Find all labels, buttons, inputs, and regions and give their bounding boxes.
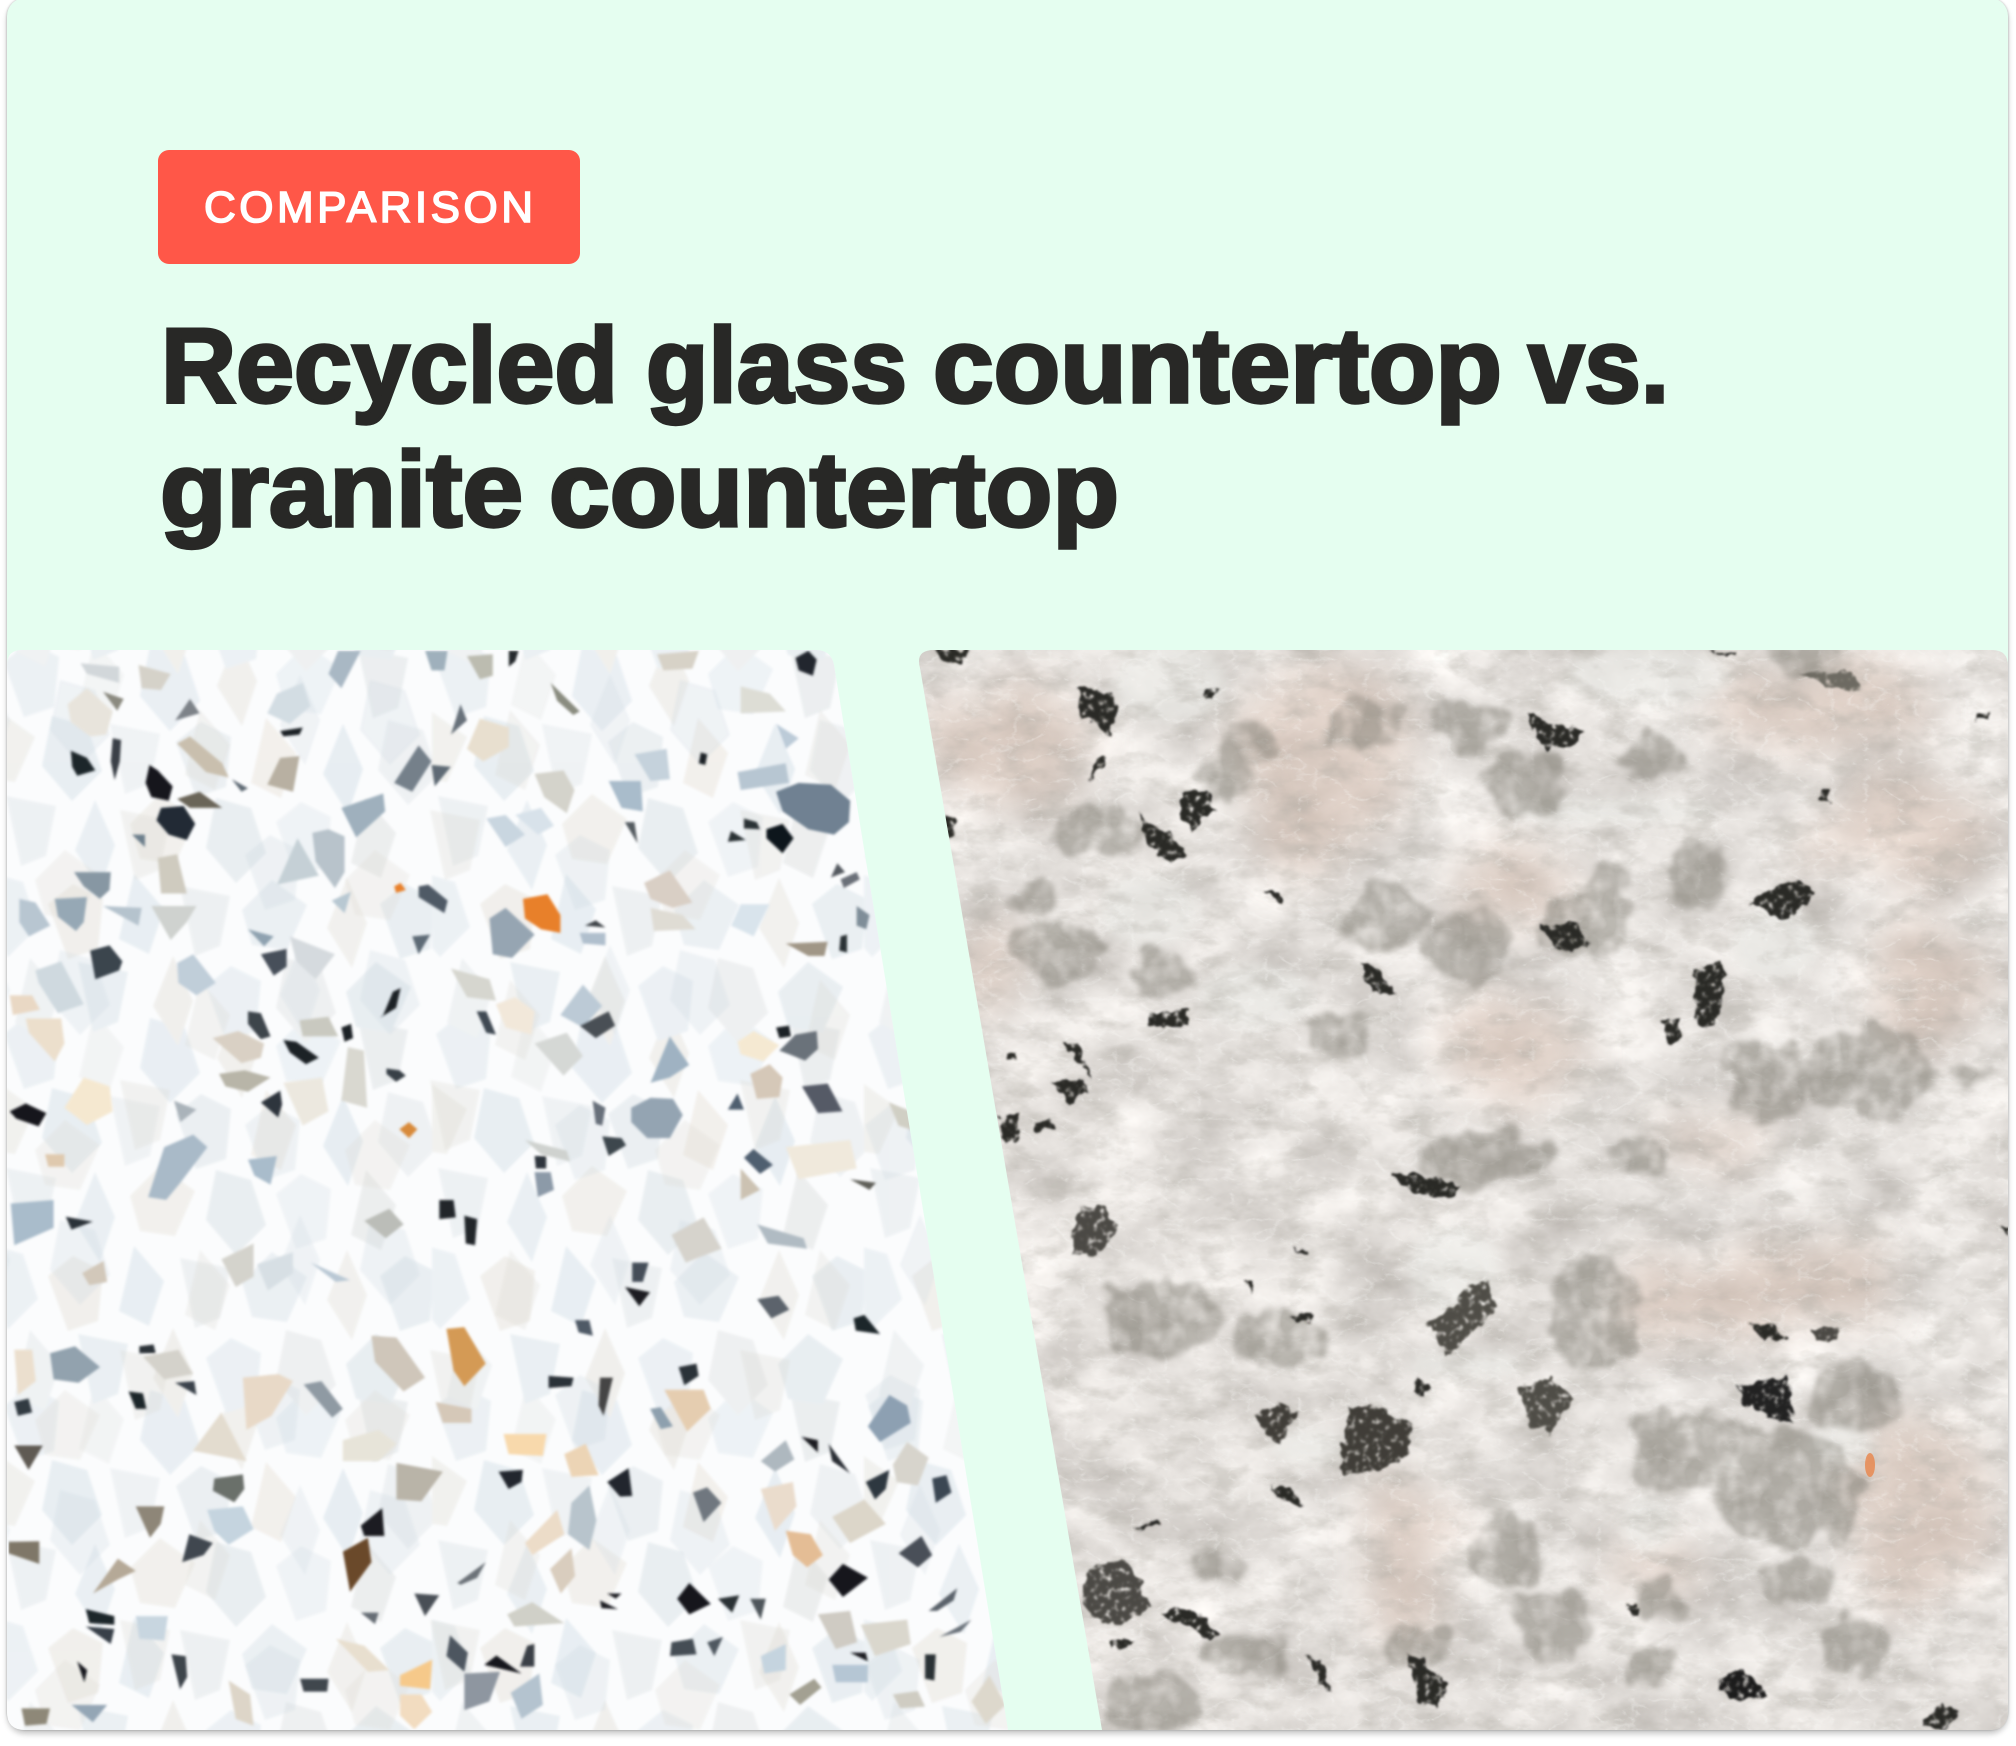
image: recycled glass terrazzo surface bbox=[0, 640, 1030, 1740]
title: glass bbox=[646, 307, 907, 425]
granite orange fleck bbox=[1865, 1453, 1875, 1477]
title bbox=[160, 307, 1669, 549]
title: granite bbox=[160, 431, 523, 549]
granite pink mineral areas bbox=[929, 661, 1996, 1625]
title: countertop bbox=[549, 431, 1119, 549]
title: countertop bbox=[933, 307, 1502, 425]
category badge bbox=[158, 150, 580, 264]
granite dark biotite specks bbox=[936, 651, 2011, 1729]
image: granite surface bbox=[900, 640, 2016, 1740]
title: vs. bbox=[1528, 307, 1669, 425]
title: Recycled bbox=[161, 307, 618, 425]
granite grey crystal patches bbox=[1007, 643, 1988, 1732]
category badge: COMPARISON bbox=[204, 183, 533, 232]
granite white quartz areas bbox=[1099, 644, 1874, 1552]
